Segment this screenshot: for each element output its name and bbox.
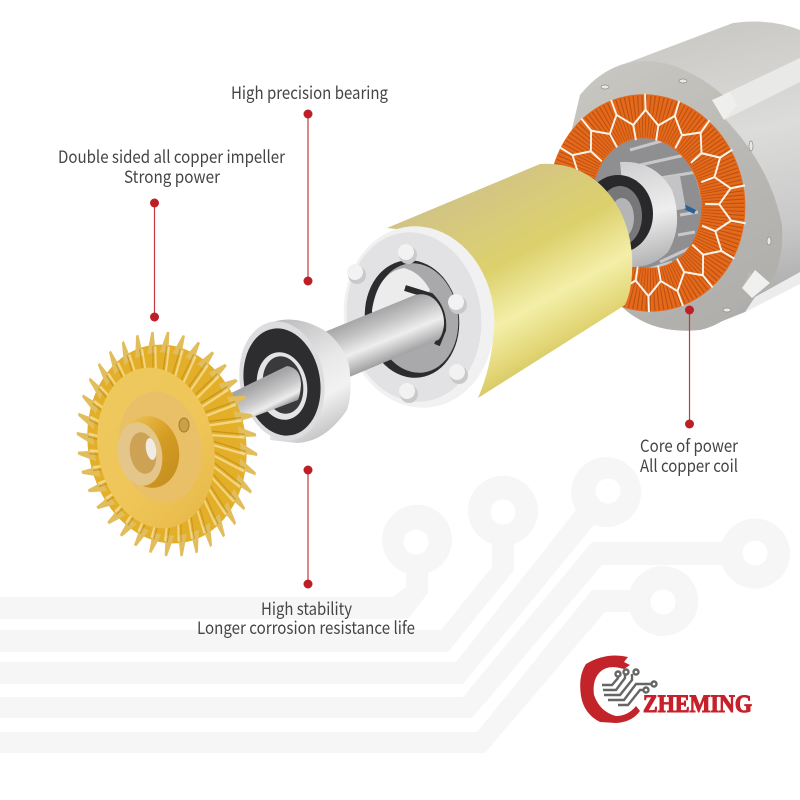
- flange ring: [332, 216, 506, 418]
- screw: [179, 418, 189, 432]
- gold motor cylinder: [387, 164, 632, 398]
- stator interior: [577, 124, 713, 286]
- rear bearing: [583, 162, 686, 267]
- label: high precision bearing: High precision bearing: [231, 79, 388, 104]
- twine net: [530, 80, 764, 326]
- callout marker: coil: [685, 306, 694, 428]
- label: core of power: All copper coil: [640, 452, 738, 477]
- label: impeller: Double sided all copper impeller: [58, 143, 285, 168]
- rivets: [601, 79, 771, 312]
- background: circuit traces: [0, 457, 790, 753]
- main shaft: [322, 294, 444, 378]
- stator housing: [560, 22, 800, 331]
- label: high stability: High stability: [261, 595, 352, 620]
- logo: circuit lines: [602, 670, 656, 705]
- raised centre: [110, 385, 210, 509]
- label: impeller: Strong power: [124, 163, 220, 188]
- stator body: [627, 22, 800, 330]
- label: high stability: [197, 595, 415, 639]
- white corner notches: [712, 92, 737, 120]
- bearing housing: [270, 320, 351, 443]
- label: impeller: [58, 143, 285, 188]
- logo: wordmark: ZHEMING: [643, 691, 752, 718]
- trace 4: [0, 518, 790, 718]
- stator end disc: [560, 61, 782, 331]
- logo: red crescent: [580, 656, 640, 723]
- logo: Zheming: [580, 656, 752, 723]
- bearing face: [230, 315, 334, 447]
- callout marker: stability: [304, 466, 312, 588]
- label: core of power: Core of power: [640, 432, 738, 457]
- callout marker: impeller: [150, 198, 159, 322]
- impeller disc: [85, 358, 227, 538]
- trace 5: [0, 566, 698, 753]
- trace 2: [0, 476, 538, 652]
- label: core of power: [640, 432, 738, 477]
- dark bore: [357, 254, 467, 384]
- trace 1: [0, 505, 452, 619]
- label: high stability: Longer corrosion resistance life: [197, 614, 415, 639]
- keyway: [405, 288, 443, 345]
- body highlight stripes: [712, 58, 800, 120]
- copper coil: [530, 80, 764, 326]
- trace 3: [0, 457, 641, 684]
- impeller: [59, 317, 275, 571]
- hub: [115, 412, 185, 492]
- small shaft: [227, 366, 301, 423]
- front flange: [332, 216, 506, 418]
- impeller blades: [59, 317, 275, 571]
- bolts: [347, 244, 468, 403]
- middle bearing: [230, 315, 351, 447]
- stator teeth: [630, 140, 698, 272]
- callout marker: bearing: [304, 110, 312, 286]
